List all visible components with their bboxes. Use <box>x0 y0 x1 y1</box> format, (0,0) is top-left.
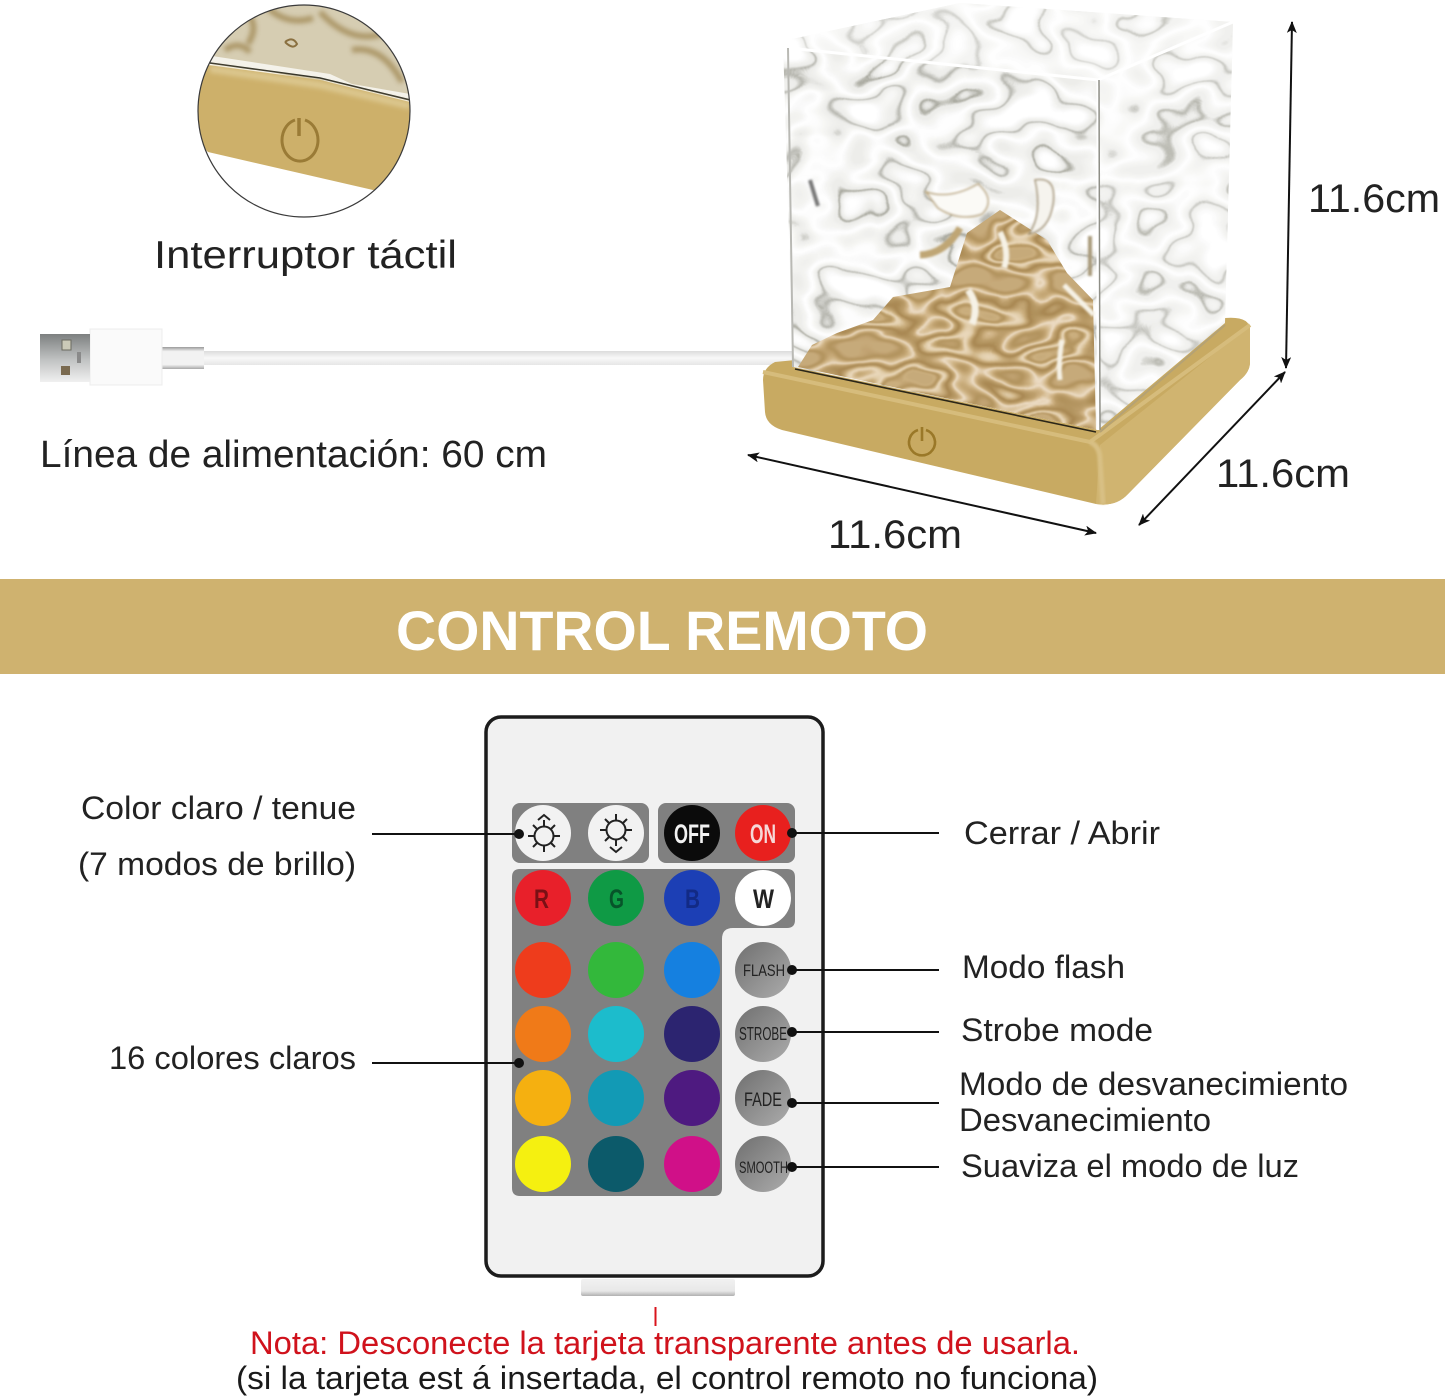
note: explanation: (si la tarjeta est á insertada, el control remoto no funciona) <box>236 1360 1098 1396</box>
power panel <box>658 803 795 863</box>
mode buttons: FLASH <box>743 961 785 980</box>
remote control <box>486 717 823 1276</box>
dimension arrow: height <box>1286 22 1292 368</box>
icon: power symbol on base <box>909 427 935 455</box>
note: remove transparent card: Nota: Desconecte la tarjeta transparente antes de usarla. <box>250 1325 1080 1361</box>
label: touch switch: Interruptor táctil <box>154 234 457 277</box>
glass cube <box>784 4 1233 433</box>
inset: touch switch close-up <box>198 5 410 217</box>
label: flash mode: Modo flash <box>962 949 1125 985</box>
heading: control remoto: CONTROL REMOTO <box>396 599 928 662</box>
tab: transparent insulation card <box>581 1279 735 1296</box>
label: fade mode: Modo de desvanecimiento <box>959 1066 1348 1102</box>
label: fade mode: Desvanecimiento <box>959 1102 1211 1138</box>
colour buttons <box>515 942 720 1192</box>
dimension arrow: depth <box>1139 372 1285 525</box>
dimension arrow: width <box>748 455 1096 533</box>
USB power cable <box>40 329 794 385</box>
power panel: OFF <box>674 819 710 849</box>
lamp: water ripple cube on gold base <box>763 0 1250 505</box>
lamp base <box>763 318 1250 505</box>
label: brightness: (7 modos de brillo) <box>78 846 356 882</box>
label: 16 colours: 16 colores claros <box>109 1040 356 1076</box>
RGBW buttons: G <box>609 884 624 914</box>
RGBW buttons: W <box>753 884 774 914</box>
RGBW buttons: R <box>534 884 549 914</box>
label: smooth mode: Suaviza el modo de luz <box>961 1148 1299 1184</box>
pointer: tab to note <box>654 1307 656 1326</box>
icon: power symbol on inset <box>282 118 318 161</box>
remote body <box>486 717 823 1276</box>
section banner <box>0 579 1445 674</box>
RGBW buttons: B <box>685 884 700 914</box>
brightness panel <box>512 803 649 863</box>
mode buttons: SMOOTH <box>739 1158 788 1177</box>
label: strobe mode: Strobe mode <box>961 1012 1153 1048</box>
label: fade mode <box>959 1066 1348 1138</box>
label: cable length: Línea de alimentación: 60 cm <box>40 434 547 476</box>
dimension label: width: 11.6cm <box>828 513 962 557</box>
label: on off: Cerrar / Abrir <box>964 815 1160 851</box>
colour panel <box>512 869 795 1196</box>
power panel: ON <box>750 819 776 849</box>
mode buttons: STROBE <box>739 1024 787 1044</box>
label: brightness: Color claro / tenue <box>81 790 356 826</box>
label: brightness <box>78 790 356 882</box>
mode buttons <box>735 942 791 1192</box>
dimension label: height: 11.6cm <box>1308 177 1440 221</box>
leader lines <box>372 828 939 1172</box>
RGBW buttons <box>515 870 791 926</box>
dimension label: depth: 11.6cm <box>1216 452 1350 496</box>
mode buttons: FADE <box>744 1090 782 1111</box>
